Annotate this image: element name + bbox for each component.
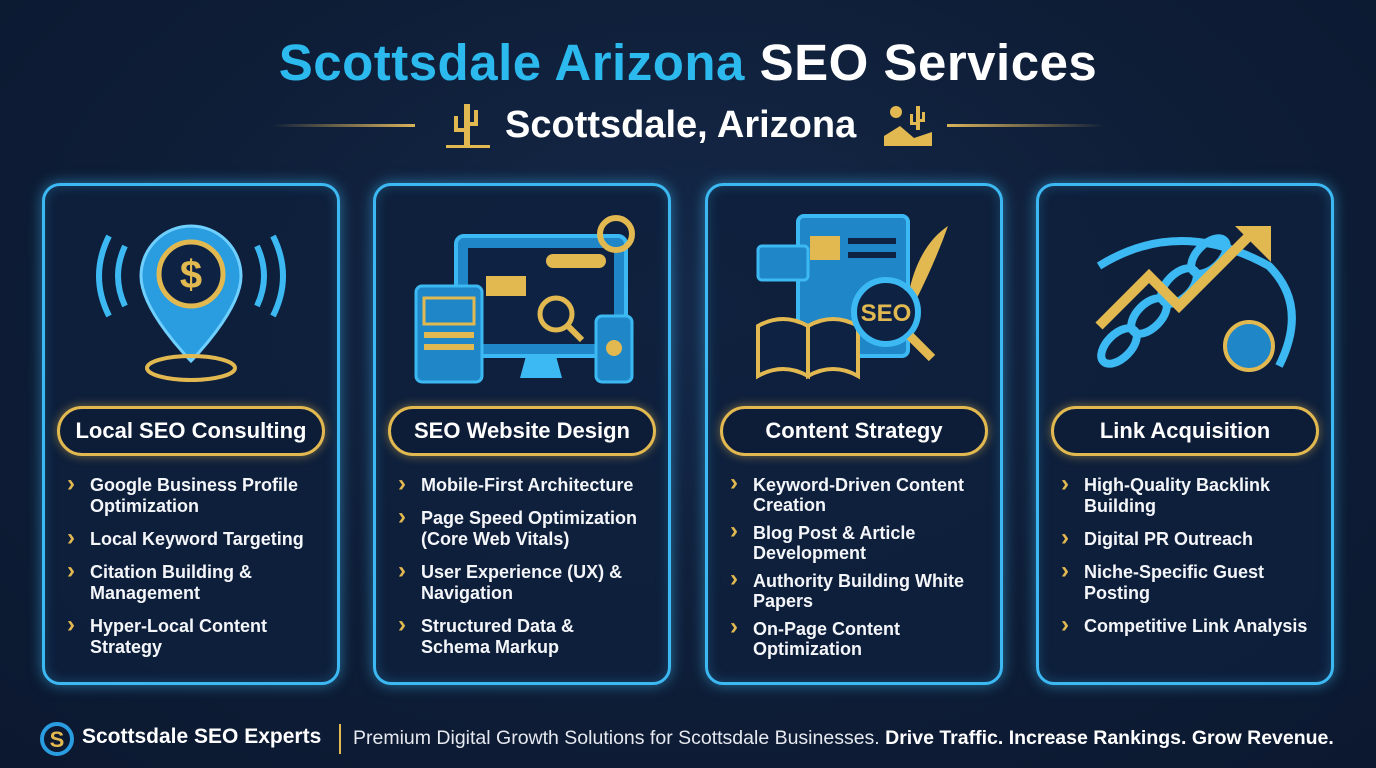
heading: Link Acquisition: [1100, 418, 1270, 443]
icon: location pin: $: [180, 253, 202, 297]
list: Keyword-Driven Content Creation: [753, 475, 964, 515]
panel: content strategy: [705, 183, 1003, 685]
heading: Content Strategy: [765, 418, 943, 443]
list: Page Speed Optimization (Core Web Vitals): [421, 508, 637, 549]
icon: logo: [40, 722, 74, 756]
heading: SEO Website Design: [414, 418, 630, 443]
list: Google Business Profile Optimization: [90, 475, 298, 516]
list: Blog Post & Article Development: [753, 523, 915, 563]
icon: document seo: [756, 214, 948, 380]
list: Structured Data & Schema Markup: [421, 616, 574, 657]
heading: [388, 406, 656, 456]
heading: [57, 406, 325, 456]
icon: document seo: SEO: [861, 300, 911, 327]
icon: chain arrow: [1096, 226, 1296, 372]
heading: Local SEO Consulting: [75, 418, 306, 443]
icon: cactus: [446, 104, 490, 148]
title: Scottsdale Arizona SEO Services: [279, 34, 1097, 91]
list: [399, 475, 637, 657]
list: Authority Building White Papers: [753, 571, 964, 611]
list: Competitive Link Analysis: [1084, 616, 1307, 636]
panel: local seo: [42, 183, 340, 685]
icon: location pin: [96, 224, 286, 382]
heading: [1051, 406, 1319, 456]
list: User Experience (UX) & Navigation: [421, 562, 622, 603]
list: On-Page Content Optimization: [753, 619, 900, 659]
footer: Premium Digital Growth Solutions for Scottsdale Businesses. Drive Traffic. Increase Rankings. Grow Revenue.: [353, 727, 1334, 749]
list: [731, 475, 964, 659]
icon: devices: [414, 215, 635, 384]
list: Digital PR Outreach: [1084, 529, 1253, 549]
list: High-Quality Backlink Building: [1084, 475, 1270, 516]
list: Mobile-First Architecture: [421, 475, 633, 495]
footer: Scottsdale SEO Experts: [82, 725, 321, 748]
list: Niche-Specific Guest Posting: [1084, 562, 1264, 603]
icon: desert sun: [884, 106, 932, 146]
heading: [720, 406, 988, 456]
footer: [40, 722, 1334, 756]
list: Hyper-Local Content Strategy: [90, 616, 267, 657]
list: Local Keyword Targeting: [90, 529, 304, 549]
list: [1062, 475, 1307, 636]
subtitle: [278, 104, 1098, 148]
panel: link acquisition: [1036, 183, 1334, 685]
list: Citation Building & Management: [90, 562, 252, 603]
icon: logo: S: [50, 727, 64, 752]
panel: website design: [373, 183, 671, 685]
list: [68, 475, 304, 657]
subtitle: Scottsdale, Arizona: [505, 104, 856, 146]
